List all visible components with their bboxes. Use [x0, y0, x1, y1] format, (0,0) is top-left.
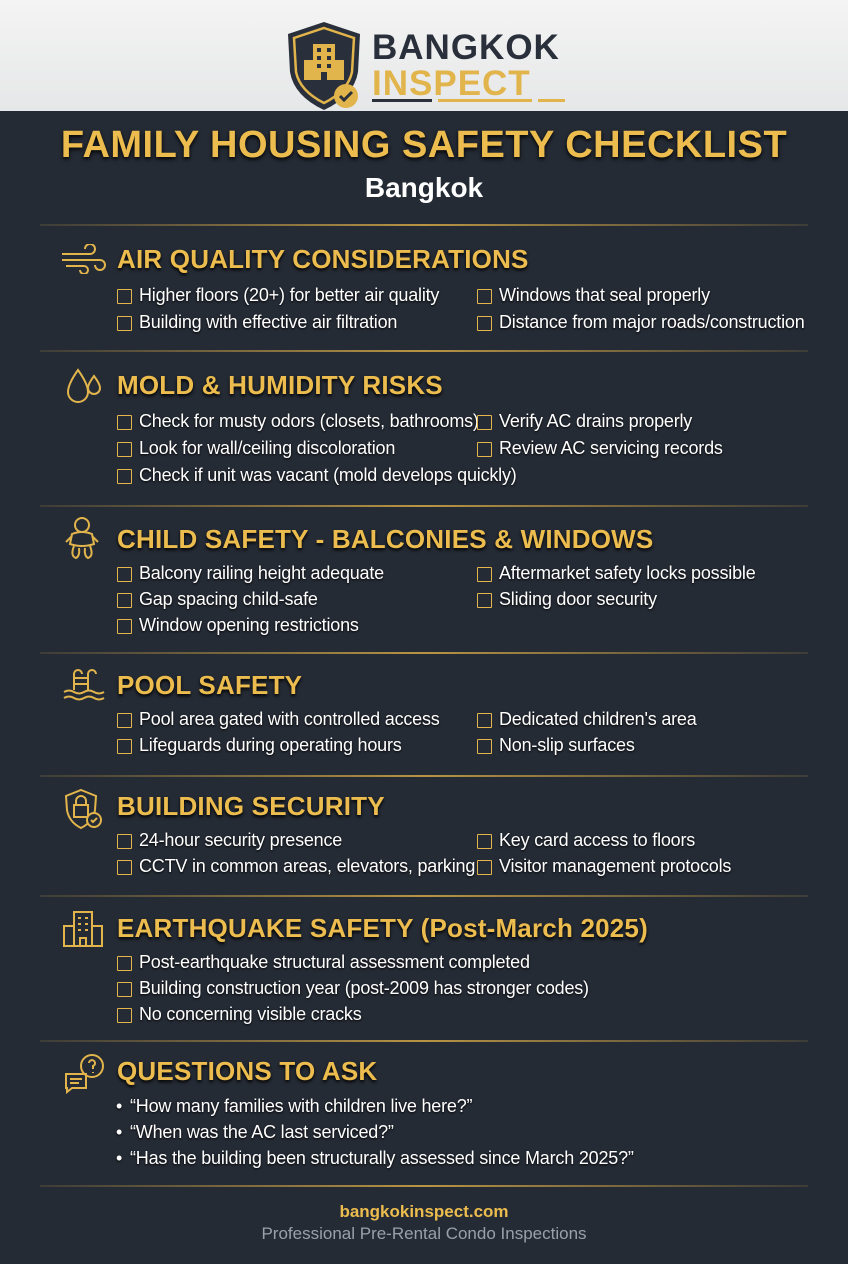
footer: bangkokinspect.com	[339, 1202, 509, 1221]
text: Check if unit was vacant (mold develops quickly)	[139, 465, 517, 485]
heading: child safety: CHILD SAFETY - BALCONIES & WINDOWS	[117, 524, 653, 554]
text: Distance from major roads/construction	[499, 312, 805, 332]
icon: pool	[64, 669, 104, 700]
logo text	[372, 28, 560, 103]
icon: building	[63, 911, 103, 947]
text: Visitor management protocols	[499, 856, 731, 876]
heading: questions: QUESTIONS TO ASK	[117, 1056, 377, 1086]
heading: air quality: AIR QUALITY CONSIDERATIONS	[117, 244, 529, 274]
logo shield	[288, 22, 360, 110]
text: Review AC servicing records	[499, 438, 723, 458]
title: FAMILY HOUSING SAFETY CHECKLIST	[61, 124, 787, 166]
footer: Professional Pre-Rental Condo Inspections	[261, 1224, 587, 1243]
text: “How many families with children live here?”	[130, 1096, 472, 1116]
text: Post-earthquake structural assessment completed	[139, 952, 530, 972]
text: “Has the building been structurally assessed since March 2025?”	[130, 1148, 634, 1168]
icon: wind	[62, 244, 106, 274]
text: Higher floors (20+) for better air quality	[139, 285, 439, 305]
icon: drops	[67, 368, 101, 403]
heading: mold: MOLD & HUMIDITY RISKS	[117, 370, 443, 400]
text: Check for musty odors (closets, bathrooms)	[139, 411, 479, 431]
text: Sliding door security	[499, 589, 657, 609]
logo text: INSPECT	[372, 64, 531, 103]
icon: security shield	[65, 788, 102, 830]
text: Aftermarket safety locks possible	[499, 563, 756, 583]
text: Windows that seal properly	[499, 285, 710, 305]
text: Look for wall/ceiling discoloration	[139, 438, 395, 458]
heading: pool: POOL SAFETY	[117, 670, 302, 700]
heading: earthquake: EARTHQUAKE SAFETY (Post-March 2025)	[117, 913, 648, 943]
text: Building construction year (post-2009 has stronger codes)	[139, 978, 589, 998]
text: Gap spacing child-safe	[139, 589, 318, 609]
text: Dedicated children's area	[499, 709, 697, 729]
text: Balcony railing height adequate	[139, 563, 384, 583]
text: Building with effective air filtration	[139, 312, 397, 332]
header band	[0, 0, 848, 111]
footer	[261, 1202, 587, 1243]
heading: building security: BUILDING SECURITY	[117, 791, 385, 821]
text: Pool area gated with controlled access	[139, 709, 440, 729]
icon: baby	[65, 517, 99, 560]
text: No concerning visible cracks	[139, 1004, 362, 1024]
text: CCTV in common areas, elevators, parking	[139, 856, 475, 876]
text: Lifeguards during operating hours	[139, 735, 402, 755]
text: Non-slip surfaces	[499, 735, 635, 755]
text: Verify AC drains properly	[499, 411, 692, 431]
subtitle: Bangkok	[365, 172, 483, 203]
text: Key card access to floors	[499, 830, 695, 850]
icon: chat bubbles	[65, 1054, 104, 1094]
logo text: BANGKOK	[372, 28, 560, 67]
text: “When was the AC last serviced?”	[130, 1122, 394, 1142]
text: Window opening restrictions	[139, 615, 359, 635]
text: 24-hour security presence	[139, 830, 342, 850]
